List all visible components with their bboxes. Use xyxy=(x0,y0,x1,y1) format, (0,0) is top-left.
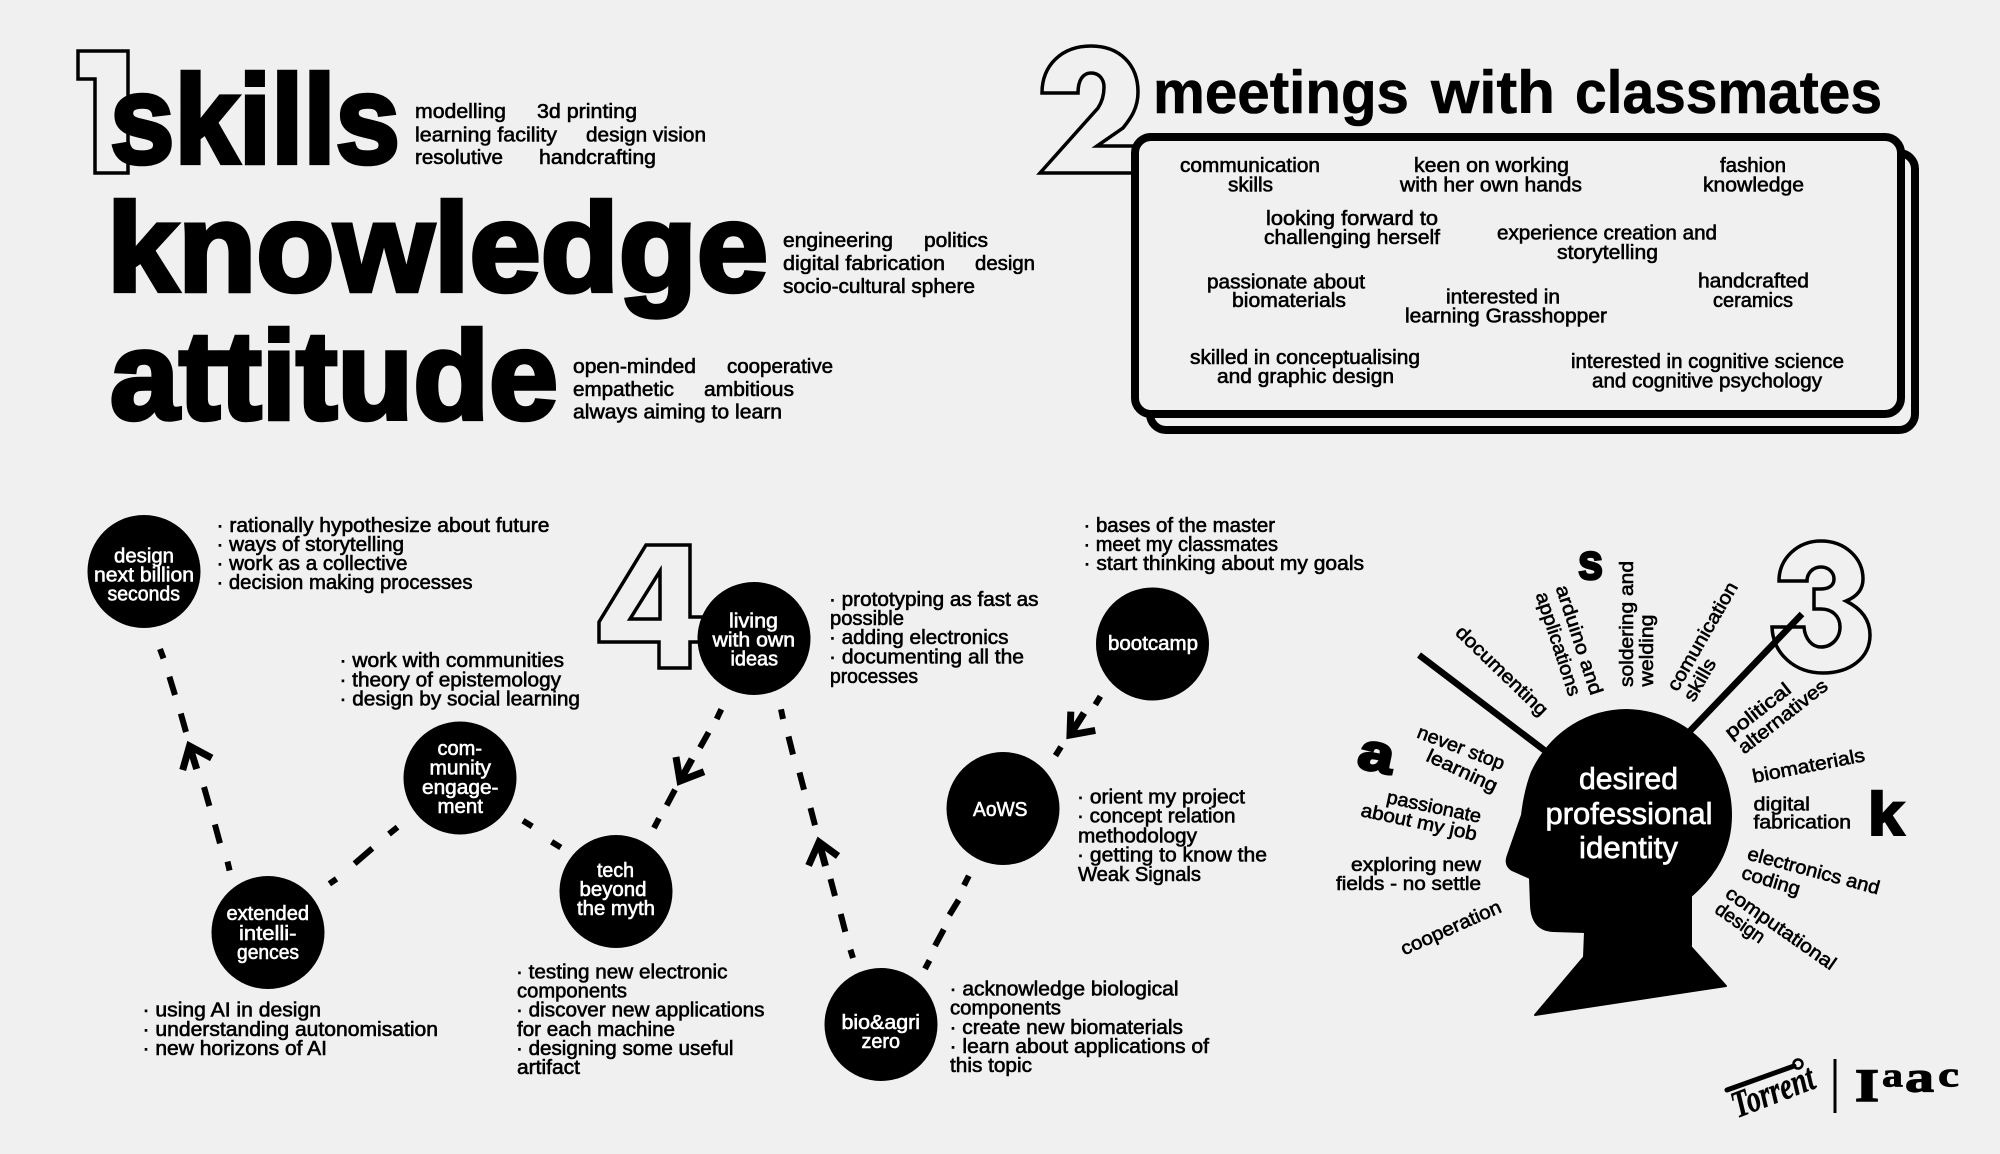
logo: Iaac: I xyxy=(1855,1060,1879,1112)
classmates' notes: looking forward to xyxy=(1266,208,1438,230)
dashed arrow: bootcamp to AoWS xyxy=(1056,696,1100,756)
knowledge around head: digital xyxy=(1754,794,1810,816)
dashed arrow: living with own ideas to tech beyond the myth xyxy=(654,709,721,828)
knowledge list: digital fabrication xyxy=(783,253,945,275)
node: bio and agri zero xyxy=(824,968,938,1081)
node: community engagement: ment xyxy=(438,796,483,818)
skills list: design vision xyxy=(586,124,706,146)
knowledge list: engineering xyxy=(783,230,893,252)
node: living with own ideas: ideas xyxy=(730,648,778,670)
classmates' notes: experience creation and xyxy=(1497,222,1717,244)
node: design next billion seconds: next billion xyxy=(94,564,194,586)
list: living with own ideas: processes xyxy=(830,666,918,688)
node: living with own ideas: living xyxy=(729,610,778,632)
skills list xyxy=(415,101,706,169)
skills list: 3d printing xyxy=(537,101,637,123)
attitude around head: passionate xyxy=(1385,787,1483,828)
back card xyxy=(1150,153,1915,430)
section 4: timeline of courses xyxy=(88,515,1364,1081)
head label: identity xyxy=(1579,830,1678,865)
list: community engagement xyxy=(340,650,580,710)
skills around head xyxy=(1451,561,1743,721)
classmates' notes: knowledge xyxy=(1703,174,1804,196)
list: community engagement: · work with communities xyxy=(340,650,564,672)
skills list: handcrafting xyxy=(539,147,656,169)
logo: Iaac: a xyxy=(1905,1052,1934,1102)
attitude list xyxy=(573,356,833,424)
knowledge list: politics xyxy=(924,230,988,252)
attitude around head: exploring new xyxy=(1351,855,1481,876)
node: design next billion seconds: seconds xyxy=(108,584,180,606)
attitude list: cooperative xyxy=(727,356,833,378)
left spike xyxy=(1419,655,1548,753)
list: living with own ideas: possible xyxy=(830,608,904,630)
node: tech beyond the myth xyxy=(560,835,672,948)
node: community engagement: com- xyxy=(438,738,482,760)
heading: knowledge: knowledge xyxy=(107,179,768,318)
classmates' notes: fashion xyxy=(1720,155,1786,177)
logo: Torrent xyxy=(1725,1056,1822,1127)
list: community engagement: · theory of epistemology xyxy=(340,670,561,692)
list: bio and agri zero xyxy=(950,978,1209,1077)
knowledge around head xyxy=(1711,676,1882,975)
list: AoWS xyxy=(1077,786,1267,886)
heading: skills: skills xyxy=(110,51,400,190)
attitude list: always aiming to learn xyxy=(573,402,782,424)
dashed arrow: bio and agri zero to living with own ideas xyxy=(781,709,853,958)
list: tech beyond the myth: artifact xyxy=(517,1057,580,1079)
list: bootcamp: · bases of the master xyxy=(1084,515,1275,537)
number 4 outline xyxy=(599,545,712,668)
node: design next billion seconds: design xyxy=(114,546,174,568)
node: community engagement: munity xyxy=(430,758,491,780)
classmates' notes xyxy=(1180,155,1844,392)
list: AoWS: methodology xyxy=(1078,826,1197,848)
list: AoWS: · getting to know the xyxy=(1077,844,1267,866)
list: design next billion seconds xyxy=(216,515,550,594)
skills list: modelling xyxy=(415,101,506,123)
classmates' notes: and graphic design xyxy=(1217,366,1394,388)
skills around head: arduino and xyxy=(1551,583,1606,698)
knowledge around head: alternatives xyxy=(1734,676,1832,759)
classmates' notes: with her own hands xyxy=(1399,174,1582,196)
classmates' notes: skills xyxy=(1228,174,1273,196)
classmates' notes: storytelling xyxy=(1557,242,1658,264)
list: living with own ideas xyxy=(829,589,1038,688)
list: living with own ideas: · documenting all the xyxy=(829,646,1024,668)
head silhouette xyxy=(1507,710,1731,1015)
right spike xyxy=(1689,614,1802,732)
logo: Torrent: Torrent xyxy=(1725,1056,1822,1127)
attitude around head xyxy=(1336,722,1508,960)
list: bio and agri zero: this topic xyxy=(950,1055,1032,1077)
node: extended intelligences: extended xyxy=(226,903,309,925)
heading: meetings with classmates: with xyxy=(1430,59,1555,126)
skills around head: soldering and xyxy=(1617,561,1638,687)
node: bio and agri zero: zero xyxy=(862,1031,900,1053)
list: living with own ideas: · adding electronics xyxy=(829,627,1008,649)
attitude list: open-minded xyxy=(573,356,696,378)
logo: Iaac xyxy=(1855,1052,1959,1112)
knowledge around head: coding xyxy=(1739,863,1803,900)
node: extended intelligences xyxy=(212,876,324,989)
list: tech beyond the myth: components xyxy=(517,980,627,1002)
skills around head: skills xyxy=(1680,655,1721,705)
classmates' notes: learning Grasshopper xyxy=(1405,306,1607,328)
skills around head: documenting xyxy=(1451,622,1552,721)
attitude around head: learning xyxy=(1423,746,1501,797)
node: tech beyond the myth: beyond xyxy=(580,879,646,901)
list: tech beyond the myth: for each machine xyxy=(517,1019,675,1041)
list: extended intelligences: · understanding autonomisation xyxy=(142,1019,438,1041)
knowledge around head: political xyxy=(1721,679,1796,744)
node: extended intelligences: gences xyxy=(237,942,299,964)
number 3 outline xyxy=(1772,541,1870,673)
list: bio and agri zero: components xyxy=(950,998,1061,1020)
knowledge list: socio-cultural sphere xyxy=(783,276,975,298)
node: tech beyond the myth: the myth xyxy=(577,898,655,920)
skills list: resolutive xyxy=(415,147,503,169)
attitude list: empathetic xyxy=(573,379,674,401)
dashed arrow: extended intelligences to design next billion seconds xyxy=(160,649,230,870)
knowledge around head: fabrication xyxy=(1754,812,1851,834)
head label xyxy=(1546,761,1712,865)
letter s: s xyxy=(1578,534,1603,590)
list: extended intelligences: · using AI in design xyxy=(142,1000,321,1022)
classmates' notes: communication xyxy=(1180,155,1320,177)
skills around head: applications xyxy=(1531,590,1584,699)
list: AoWS: · orient my project xyxy=(1077,786,1245,808)
list: extended intelligences xyxy=(142,1000,438,1060)
classmates' notes: interested in xyxy=(1446,286,1560,308)
list: tech beyond the myth: · testing new electronic xyxy=(516,962,728,984)
attitude around head: about my job xyxy=(1359,800,1479,845)
skills list: learning facility xyxy=(415,124,557,146)
list: AoWS: · concept relation xyxy=(1077,806,1236,828)
list: design next billion seconds: · rationally hypothesize about future xyxy=(216,515,550,537)
dashed line: extended intelligences to community engagement xyxy=(329,827,398,884)
list: tech beyond the myth xyxy=(516,962,764,1079)
logo divider xyxy=(1834,1059,1836,1113)
knowledge around head: biomaterials xyxy=(1751,745,1867,788)
front card xyxy=(1135,137,1901,414)
section 1: skills, knowledge, attitude xyxy=(78,51,1035,446)
attitude list: ambitious xyxy=(704,379,794,401)
classmates' notes: handcrafted xyxy=(1698,270,1809,292)
heading: meetings with classmates: classmates xyxy=(1575,59,1882,126)
node: bio and agri zero: bio&agri xyxy=(842,1012,920,1034)
dashed line: community engagement to tech beyond the myth xyxy=(523,821,561,848)
list: design next billion seconds: · work as a collective xyxy=(216,553,408,575)
attitude around head: fields - no settle xyxy=(1336,874,1481,895)
skills around head: welding xyxy=(1637,614,1658,688)
list: extended intelligences: · new horizons of AI xyxy=(142,1038,327,1060)
node: AoWS: AoWS xyxy=(973,799,1028,821)
knowledge list: design xyxy=(975,253,1035,275)
node: bootcamp: bootcamp xyxy=(1108,633,1198,655)
list: AoWS: Weak Signals xyxy=(1078,864,1201,886)
number 1 outline xyxy=(78,51,128,173)
list: community engagement: · design by social learning xyxy=(340,688,580,710)
knowledge around head: computational xyxy=(1721,883,1840,975)
list: tech beyond the myth: · discover new applications xyxy=(516,1000,764,1022)
classmates' notes: biomaterials xyxy=(1232,290,1346,312)
node: living with own ideas xyxy=(698,582,810,695)
knowledge list xyxy=(783,230,1035,298)
attitude around head: cooperation xyxy=(1398,897,1505,960)
classmates' notes: ceramics xyxy=(1713,290,1793,312)
head label: desired xyxy=(1579,761,1678,796)
node: extended intelligences: intelli- xyxy=(239,923,296,945)
classmates' notes: and cognitive psychology xyxy=(1592,370,1822,392)
node: AoWS xyxy=(946,752,1060,865)
node: tech beyond the myth: tech xyxy=(597,860,634,882)
node: community engagement xyxy=(404,722,516,834)
classmates' notes: passionate about xyxy=(1207,272,1365,294)
knowledge around head: design xyxy=(1711,899,1769,948)
letter a: a xyxy=(1353,722,1401,786)
list: bootcamp: · meet my classmates xyxy=(1084,534,1278,556)
classmates' notes: skilled in conceptualising xyxy=(1190,347,1420,369)
node: design next billion seconds xyxy=(88,515,200,628)
logo: Iaac: a xyxy=(1882,1058,1903,1094)
section 2: meetings with classmates xyxy=(1040,46,1915,430)
attitude around head: never stop xyxy=(1414,722,1508,775)
heading: meetings with classmates: meetings xyxy=(1153,59,1409,126)
list: bootcamp xyxy=(1084,515,1364,575)
node: community engagement: engage- xyxy=(422,777,498,799)
list: design next billion seconds: · decision making processes xyxy=(216,572,472,594)
classmates' notes: challenging herself xyxy=(1264,227,1440,249)
classmates' notes: interested in cognitive science xyxy=(1571,351,1844,373)
list: bio and agri zero: · create new biomaterials xyxy=(950,1017,1183,1039)
dashed line: AoWS to bio and agri zero xyxy=(925,876,969,969)
node: living with own ideas: with own xyxy=(711,630,795,652)
heading: meetings with classmates xyxy=(1153,59,1882,126)
list: bio and agri zero: · learn about applications of xyxy=(950,1036,1209,1058)
list: bootcamp: · start thinking about my goals xyxy=(1084,553,1364,575)
classmates' notes: keen on working xyxy=(1414,155,1569,177)
number 2 outline xyxy=(1040,46,1140,173)
heading: attitude: attitude xyxy=(110,307,558,446)
section 3: desired professional identity xyxy=(1336,534,1905,1015)
list: living with own ideas: · prototyping as fast as xyxy=(829,589,1038,611)
letter k: k xyxy=(1868,781,1905,848)
logo: Iaac: c xyxy=(1938,1054,1959,1094)
knowledge around head: electronics and xyxy=(1745,844,1882,899)
node: bootcamp xyxy=(1096,588,1209,700)
skills around head: comunication xyxy=(1664,579,1743,695)
list: tech beyond the myth: · designing some useful xyxy=(516,1038,734,1060)
list: design next billion seconds: · ways of storytelling xyxy=(216,534,404,556)
head label: professional xyxy=(1546,796,1712,831)
list: bio and agri zero: · acknowledge biological xyxy=(950,978,1178,1000)
